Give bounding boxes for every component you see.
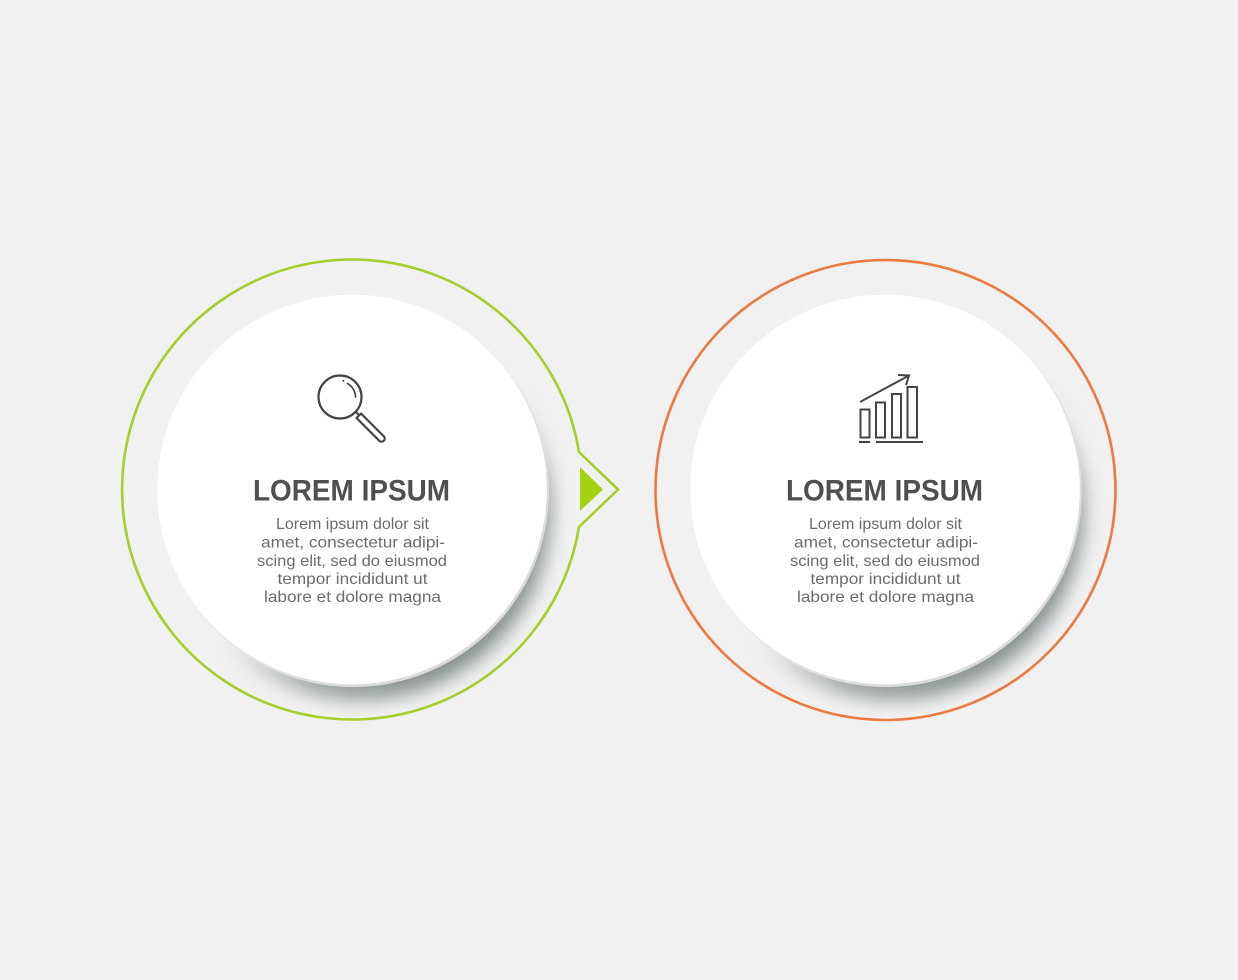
text block: right: amet, consectetur adipi-: [794, 534, 978, 552]
text block: right: labore et dolore magna: [797, 589, 974, 606]
text block: left: amet, consectetur adipi-: [261, 534, 445, 552]
arrow triangle: green: [580, 467, 603, 511]
text block: left: [257, 516, 447, 606]
text block: left: scing elit, sed do eiusmod: [257, 553, 447, 570]
text block: right: scing elit, sed do eiusmod: [790, 553, 980, 570]
text block: right: tempor incididunt ut: [810, 571, 961, 588]
outline ring with arrow notch: green: [122, 260, 618, 720]
text block: left: Lorem ipsum dolor sit: [276, 516, 430, 533]
text block: left: labore et dolore magna: [264, 589, 441, 606]
icon: magnifying glass: [318, 376, 385, 442]
outline ring: orange: [656, 260, 1116, 720]
heading: left: LOREM IPSUM: [253, 474, 450, 508]
white disc: left: [157, 295, 549, 687]
panel: right circle step: [656, 260, 1116, 720]
white disc: right: [690, 295, 1082, 687]
panel: left circle step: [122, 260, 618, 720]
text block: right: [790, 516, 980, 606]
text block: left: tempor incididunt ut: [278, 571, 428, 588]
icon: bar chart with rising arrow: [859, 375, 923, 442]
disc shadow: left: [166, 314, 552, 700]
text block: right: Lorem ipsum dolor sit: [809, 516, 963, 533]
disc shadow: right: [699, 314, 1085, 700]
heading: right: LOREM IPSUM: [786, 474, 983, 508]
